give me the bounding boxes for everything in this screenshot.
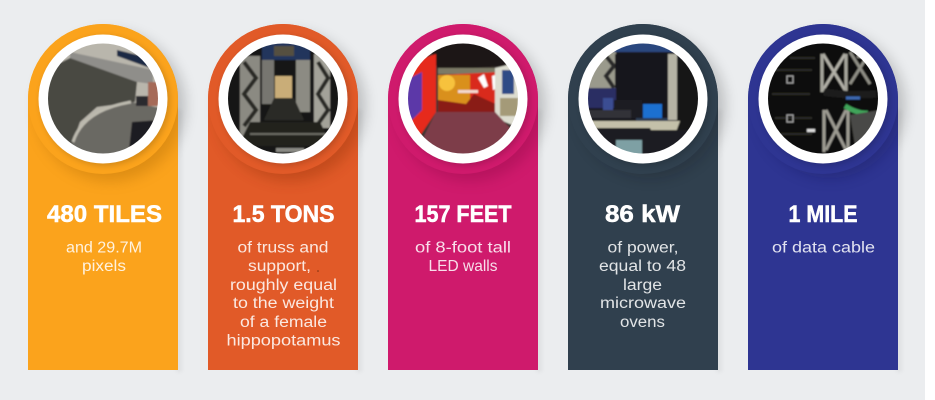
text: power equal to microwave ovens: large bbox=[623, 277, 662, 294]
text: truss and support description: of a female bbox=[240, 314, 327, 331]
heading: 157 feet: 157 FEET bbox=[414, 201, 512, 228]
text: truss and support description: roughly equal bbox=[230, 277, 337, 294]
heading: 1.5 tons: 1.5 TONS bbox=[232, 201, 334, 228]
text: 8-foot tall LED walls: LED walls bbox=[428, 258, 498, 275]
heading: 480 tiles: 480 TILES bbox=[47, 201, 162, 228]
text: 8-foot tall LED walls bbox=[415, 240, 511, 275]
photo: curved LED wall bbox=[46, 42, 160, 158]
text: power equal to microwave ovens: equal to 48 bbox=[599, 258, 686, 275]
panel: 480 tiles bbox=[28, 24, 185, 372]
text: truss and support description: of truss and bbox=[238, 240, 328, 256]
text: truss and support description bbox=[226, 240, 341, 350]
photo: truss corridor bbox=[226, 42, 340, 156]
text: data cable: of data cable bbox=[772, 240, 875, 256]
text: 8-foot tall LED walls: of 8-foot tall bbox=[415, 240, 511, 256]
text: power equal to microwave ovens: microwave bbox=[600, 295, 686, 312]
text: and 29.7M pixels: pixels bbox=[82, 258, 126, 275]
text: and 29.7M pixels bbox=[66, 240, 142, 275]
photo: red LED corridor bbox=[406, 42, 520, 156]
panel: 1.5 tons bbox=[208, 24, 365, 372]
text: power equal to microwave ovens bbox=[599, 240, 686, 331]
text: truss and support description: hippopotamus bbox=[226, 332, 341, 350]
text: truss and support description: support, bbox=[248, 258, 311, 275]
text: power equal to microwave ovens: of power, bbox=[608, 240, 678, 256]
heading: 86 kW: 86 kW bbox=[605, 201, 680, 228]
photo: control desk and monitors bbox=[586, 42, 701, 156]
text: power equal to microwave ovens: ovens bbox=[620, 314, 665, 331]
text: and 29.7M pixels: and 29.7M bbox=[66, 240, 142, 256]
text: truss and support description: to the weight bbox=[233, 295, 335, 312]
panel: 1 mile bbox=[748, 24, 905, 372]
heading: 1 mile: 1 MILE bbox=[788, 201, 858, 228]
panel: 86 kW bbox=[568, 24, 725, 372]
photo: data cables and truss bbox=[766, 42, 880, 156]
panel: 157 feet bbox=[388, 24, 545, 372]
